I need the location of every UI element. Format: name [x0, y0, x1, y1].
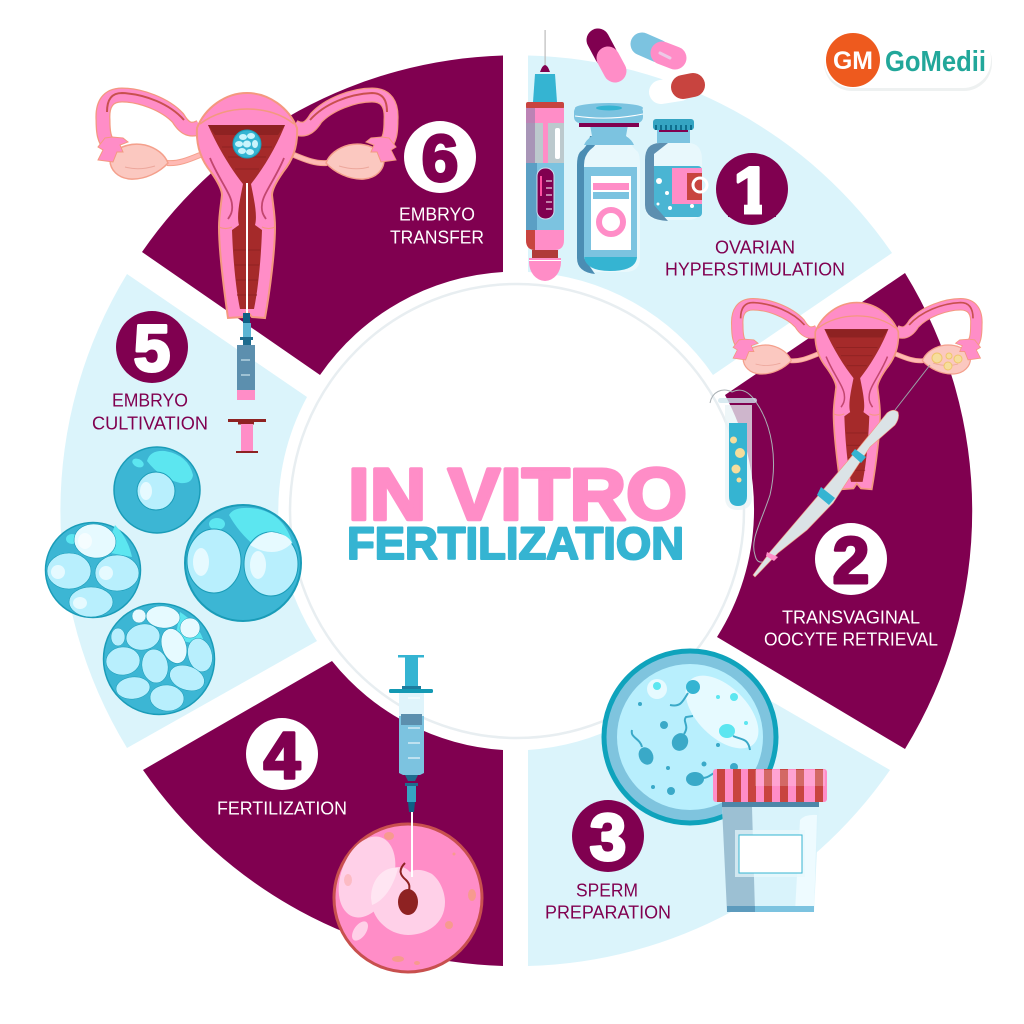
label: transvaginal oocyte retrieval: OOCYTE RETRIEVAL: [764, 630, 938, 650]
icon: injection pen: [526, 30, 564, 281]
label: embryo transfer: [390, 204, 484, 248]
number badge 1: 1: [734, 153, 770, 227]
illustration: egg being fertilized: [328, 824, 482, 972]
label: transvaginal oocyte retrieval: [764, 608, 938, 650]
number badge 4: [246, 718, 318, 792]
icon: small vial: [645, 119, 707, 221]
label: sperm preparation: [545, 880, 671, 922]
icon: syringe: [389, 655, 433, 877]
label: ovarian hyperstimulation: [665, 238, 845, 280]
label: embryo transfer: TRANSFER: [390, 228, 484, 248]
label: ovarian hyperstimulation: HYPERSTIMULATION: [665, 260, 845, 280]
number badge 6: 6: [422, 121, 458, 195]
icon: petri dish with sperm: [604, 651, 776, 823]
label: embryo cultivation: CULTIVATION: [92, 414, 208, 434]
label: embryo transfer: EMBRYO: [399, 204, 475, 224]
label: sperm preparation: SPERM: [576, 880, 638, 900]
panel: step 4 fertilization: [143, 661, 503, 966]
label: ovarian hyperstimulation: OVARIAN: [715, 238, 795, 258]
panel: step 1 ovarian hyperstimulation: [528, 56, 892, 375]
number badge 2: 2: [833, 523, 869, 597]
label: sperm preparation: PREPARATION: [545, 902, 671, 922]
number badge 6: [404, 121, 476, 195]
number badge 2: [815, 523, 887, 597]
icon: pills: [598, 40, 693, 92]
number badge 3: [572, 800, 644, 874]
label: embryo cultivation: EMBRYO: [112, 390, 188, 410]
illustration: uterus with embryo and catheter: [98, 93, 396, 318]
icon: two-cell embryo: [185, 505, 301, 621]
number badge 5: 5: [134, 311, 170, 385]
label: embryo cultivation: [92, 390, 208, 434]
label: transvaginal oocyte retrieval: TRANSVAGINAL: [782, 608, 920, 628]
logo: GoMedii: [824, 31, 992, 91]
icon: specimen cup: [713, 769, 827, 912]
centre ring: [290, 284, 744, 738]
panel: step 5 embryo cultivation: [60, 274, 317, 748]
illustration: uterus with follicles: [733, 303, 980, 489]
title: IN VITRO: [348, 454, 687, 536]
icon: large vial: [574, 103, 643, 274]
icon: retrieval probe: [753, 365, 930, 577]
number badge 1: [716, 153, 788, 227]
panel: step 6 embryo transfer: [142, 56, 503, 375]
icon: one-cell embryo: [114, 447, 200, 533]
logo: GoMedii: GM: [833, 47, 873, 75]
icon: test tube with wire: [710, 390, 774, 562]
number badge 3: 3: [590, 800, 626, 874]
label: fertilization: FERTILIZATION: [217, 798, 347, 818]
panel: step 3 sperm preparation: [528, 660, 890, 966]
number badge 5: [116, 311, 188, 385]
icon: four-cell embryo: [46, 521, 140, 618]
icon: morula embryo: [104, 604, 216, 714]
title: [347, 454, 687, 569]
icon: transfer syringe: [228, 313, 266, 453]
logo: GoMedii: GoMedii: [885, 46, 986, 78]
title: FERTILIZATION: [347, 518, 684, 569]
number badge 4: 4: [264, 718, 301, 792]
panel: step 2 oocyte retrieval: [717, 273, 972, 749]
